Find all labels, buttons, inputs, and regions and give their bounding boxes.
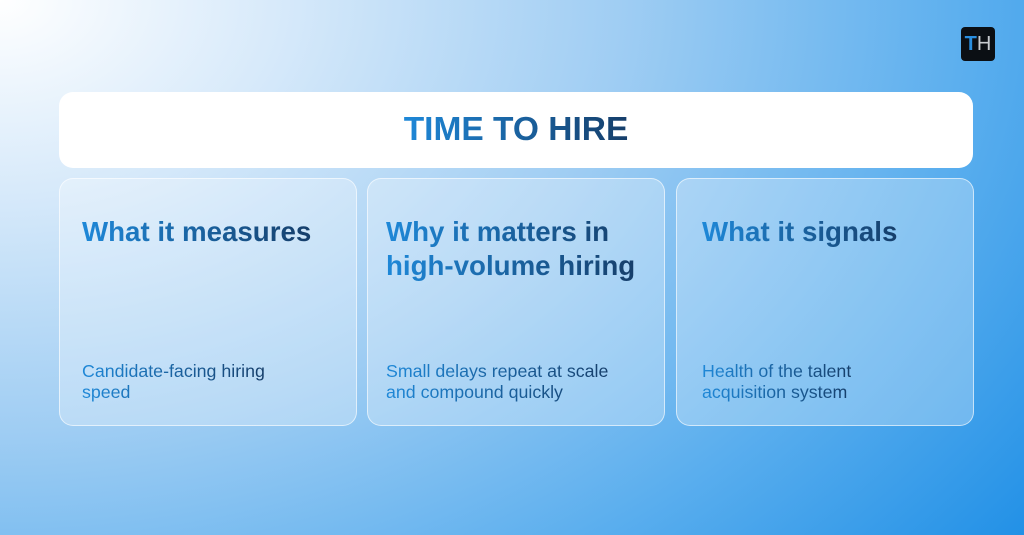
text: Candidate-facing hiring bbox=[82, 361, 265, 381]
heading: What it measures bbox=[82, 216, 311, 247]
heading: What it signals bbox=[702, 216, 897, 247]
title: TIME TO HIRE bbox=[404, 111, 628, 148]
text bbox=[386, 361, 608, 403]
text bbox=[82, 361, 265, 403]
panel: what it measures bbox=[59, 178, 357, 426]
text: and compound quickly bbox=[386, 382, 563, 402]
panel: what it signals bbox=[676, 178, 974, 426]
text: speed bbox=[82, 382, 130, 402]
text: acquisition system bbox=[702, 382, 847, 402]
text: Health of the talent bbox=[702, 361, 851, 381]
logo bbox=[961, 27, 995, 61]
text bbox=[702, 361, 851, 403]
title bbox=[59, 92, 973, 168]
logo: H bbox=[977, 32, 991, 54]
heading: Why it matters in bbox=[386, 216, 609, 247]
heading bbox=[386, 215, 635, 283]
logo: T bbox=[965, 32, 977, 54]
text: Small delays repeat at scale bbox=[386, 361, 608, 381]
heading: high-volume hiring bbox=[386, 250, 635, 281]
panel: why it matters bbox=[367, 178, 665, 426]
